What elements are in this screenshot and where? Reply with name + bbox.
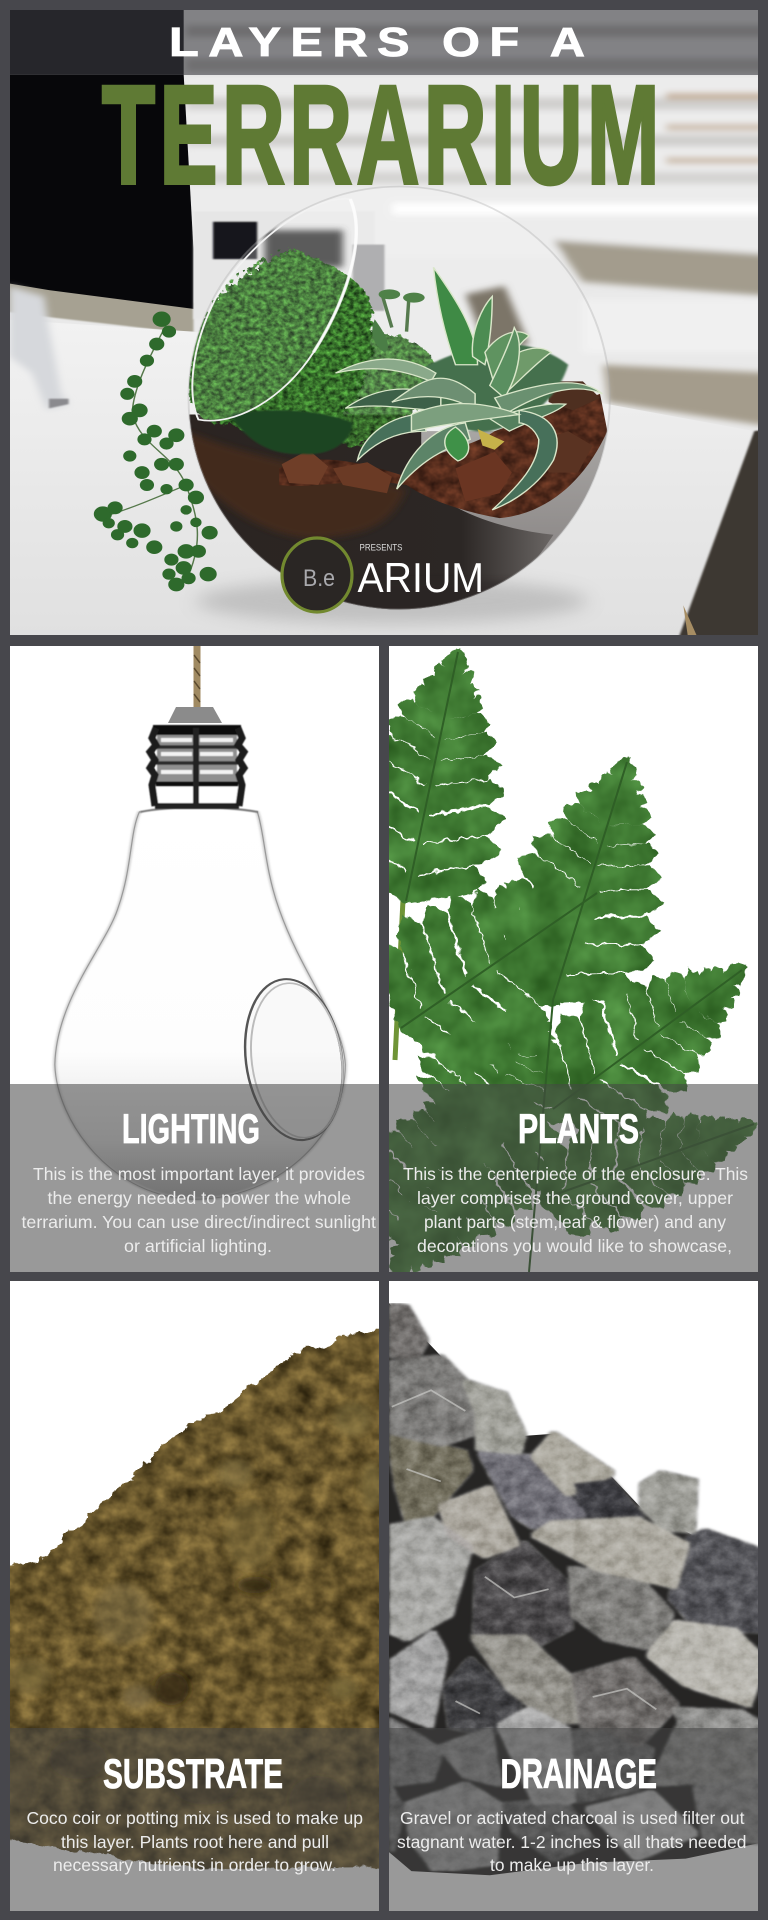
text: drainage description: to make up this layer. bbox=[490, 1855, 654, 1875]
heading: plants: PLANTS bbox=[518, 1105, 639, 1152]
moss plant bbox=[340, 330, 436, 448]
text: drainage description bbox=[397, 1808, 746, 1875]
logo wordmark: ARIUM bbox=[358, 554, 484, 601]
small sprouts bbox=[382, 294, 409, 332]
text: lighting description: This is the most important layer, it provides bbox=[33, 1164, 365, 1184]
icon: gravel pile bbox=[387, 1301, 764, 1875]
caption overlay bbox=[389, 1728, 758, 1911]
succulent plant bbox=[336, 267, 602, 510]
text: substrate description: Coco coir or potting mix is used to make up bbox=[26, 1808, 363, 1828]
title strip bbox=[10, 10, 758, 75]
side opening bbox=[244, 978, 344, 1142]
logo: Be Arium bbox=[282, 538, 484, 612]
rope bbox=[194, 646, 200, 707]
panel: hero photo of glass terrarium on a desk bbox=[0, 0, 768, 663]
text: lighting description bbox=[22, 1164, 376, 1256]
logo ring bbox=[282, 538, 352, 612]
icon: glass globe with soil and plants bbox=[96, 187, 617, 614]
stone veins bbox=[392, 1390, 656, 1714]
globe shadow on the desk bbox=[196, 578, 588, 624]
panel: plants bbox=[327, 633, 768, 1318]
heading: substrate: SUBSTRATE bbox=[103, 1750, 283, 1797]
caption overlay bbox=[10, 1084, 379, 1272]
logo presents label: PRESENTS bbox=[360, 542, 402, 554]
screw thread bbox=[140, 728, 258, 812]
dark gaps between stones bbox=[387, 1301, 764, 1875]
text: substrate description: this layer. Plants root here and pull bbox=[61, 1832, 329, 1852]
text: lighting description: terrarium. You can use direct/indirect sunlight bbox=[22, 1212, 376, 1232]
heading: layers of a: LAYERS OF A bbox=[169, 19, 585, 65]
panel: lighting bbox=[10, 646, 379, 1272]
text: drainage description: Gravel or activated charcoal is used filter out bbox=[400, 1808, 745, 1828]
mound lumps bbox=[5, 1403, 383, 1825]
text: lighting description: the energy needed to power the whole bbox=[48, 1188, 351, 1208]
text: lighting description: or artificial lighting. bbox=[124, 1236, 272, 1256]
lower glass wall bbox=[186, 431, 617, 614]
dark sand layer bbox=[186, 415, 553, 614]
text: drainage description: stagnant water. 1-2 inches is all thats needed bbox=[397, 1832, 746, 1852]
panel: substrate bbox=[0, 1281, 392, 1911]
fern midribs bbox=[401, 652, 754, 1272]
glass body bbox=[55, 811, 352, 1199]
text: plants description: layer comprises the ground cover, upper bbox=[417, 1188, 733, 1208]
heading: drainage: DRAINAGE bbox=[500, 1750, 657, 1797]
text: plants description: This is the centerpiece of the enclosure. This bbox=[403, 1164, 748, 1184]
text: plants description: plant parts (stem,leaf & flower) and any bbox=[424, 1212, 726, 1232]
title: terrarium: TERRARIUM bbox=[102, 57, 659, 213]
caption overlay bbox=[389, 1084, 758, 1272]
photo background: window blinds, monitor and desk bbox=[0, 0, 768, 663]
panel background bbox=[10, 646, 379, 1272]
succulent base mass bbox=[421, 344, 568, 432]
text: substrate description bbox=[26, 1808, 363, 1875]
panel: drainage bbox=[387, 1281, 764, 1911]
bulb cap bbox=[168, 707, 222, 723]
bark chips bbox=[279, 394, 607, 518]
logo initials: B.e bbox=[303, 565, 335, 592]
text: plants description bbox=[403, 1164, 748, 1256]
glass rims bbox=[189, 187, 610, 609]
heading: lighting: LIGHTING bbox=[122, 1105, 260, 1152]
icon: glass light bulb terrarium bbox=[55, 646, 352, 1199]
trailing vine bbox=[96, 313, 216, 590]
icon: soil mound bbox=[0, 1322, 392, 1869]
panel background bbox=[10, 1281, 379, 1911]
panel background bbox=[389, 1281, 758, 1911]
text: substrate description: necessary nutrients in order to grow. bbox=[53, 1855, 336, 1875]
text: plants description: decorations you would like to showcase, bbox=[417, 1236, 732, 1256]
caption overlay bbox=[10, 1728, 379, 1911]
mound body bbox=[0, 1322, 392, 1869]
items seen through glass bbox=[264, 230, 343, 267]
icon: fern fronds bbox=[389, 648, 758, 1272]
panel background bbox=[389, 646, 758, 1272]
